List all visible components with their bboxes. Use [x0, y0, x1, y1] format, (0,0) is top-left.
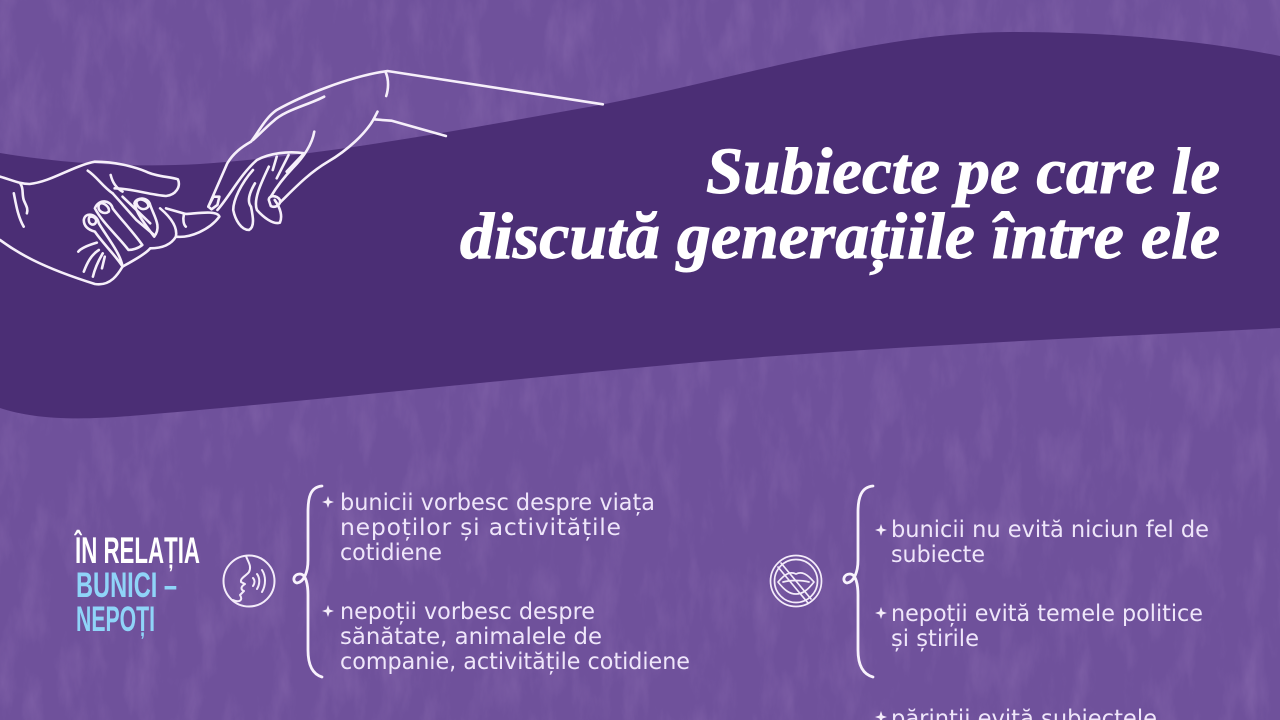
topics list: companie, activitățile cotidiene: [340, 647, 690, 675]
topics list: sănătate, animalele de: [340, 622, 602, 650]
topics list: cotidiene: [340, 538, 442, 566]
section label: relationship: ÎN RELAȚIA: [74, 529, 200, 572]
section label: relationship: BUNICI –: [76, 566, 177, 605]
title: [460, 135, 1220, 275]
illustration: two hands touching: [0, 71, 603, 284]
lower hand: [0, 162, 219, 284]
icon: crossed-out lips: [770, 556, 822, 606]
text block: what they avoid: [875, 515, 1209, 720]
avoided list: bunicii nu evită niciun fel de: [891, 515, 1209, 543]
bullet stars: [322, 496, 334, 617]
avoided list: subiecte: [891, 540, 985, 568]
bullet stars: [875, 524, 887, 720]
topics list: bunicii vorbesc despre viața: [340, 488, 655, 516]
topics list: [340, 488, 690, 675]
icon: speaking face: [224, 556, 274, 606]
avoided list: [891, 515, 1209, 720]
avoided list: nepoții evită temele politice: [891, 599, 1203, 627]
section label: relationship: [74, 529, 200, 639]
dark wavy title band: [0, 32, 1280, 418]
topics list: nepoților și activitățile: [340, 513, 621, 541]
text block: what they talk about: [322, 488, 690, 675]
upper hand: [208, 71, 603, 230]
title: Subiecte pe care le: [706, 135, 1220, 208]
section label: relationship: NEPOȚI: [76, 600, 155, 639]
avoided list: și știrile: [891, 624, 979, 652]
brace: speaking topics: [294, 486, 322, 677]
title: discută generațiile între ele: [460, 200, 1220, 275]
topics list: nepoții vorbesc despre: [340, 597, 595, 625]
brace: avoided topics: [844, 486, 873, 677]
